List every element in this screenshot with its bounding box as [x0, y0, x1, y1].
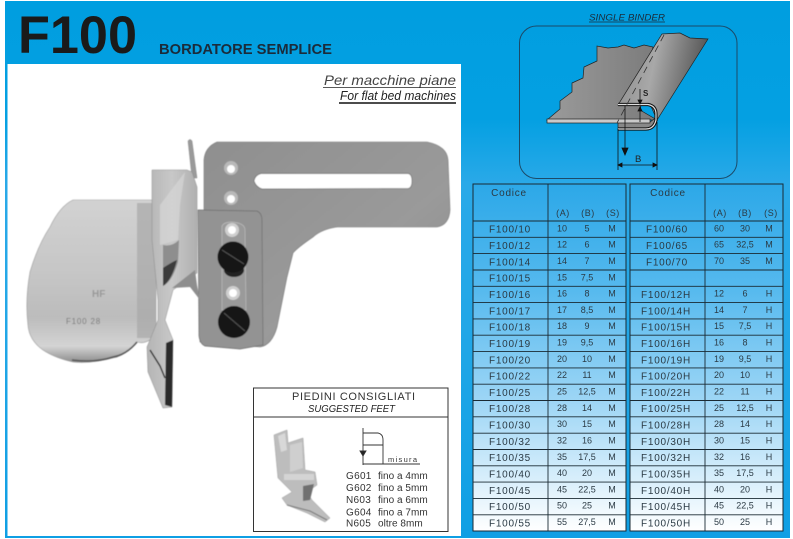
row F100/28H: 28 [714, 419, 724, 429]
row F100/40H: F100/40H [641, 486, 691, 497]
header row: (A) [556, 208, 570, 218]
row F100/15 [489, 272, 616, 285]
row F100/50H: 50 [714, 517, 724, 527]
row F100/70 [646, 256, 773, 268]
row F100/17: M [608, 305, 616, 315]
row F100/35H: H [766, 468, 772, 478]
row F100/25 [489, 386, 616, 399]
header row [491, 188, 620, 218]
row F100/19: 19 [557, 338, 567, 348]
header row: (B) [738, 208, 752, 218]
table: right codes [630, 184, 783, 531]
header row: (A) [713, 208, 727, 218]
row F100/15: 15 [557, 272, 567, 282]
row F100/50H: F100/50H [641, 518, 691, 530]
foot size list: G601 [346, 471, 372, 482]
row F100/22H: 22 [714, 386, 724, 396]
row F100/15: 7,5 [581, 272, 593, 282]
row F100/40: 20 [582, 468, 592, 478]
row F100/17: F100/17 [489, 306, 531, 317]
subtitle: Bordatore semplice: BORDATORE SEMPLICE [159, 41, 332, 58]
row F100/40H: 40 [714, 484, 724, 494]
row F100/19H: F100/19H [641, 355, 691, 366]
row F100/28H: H [766, 419, 772, 429]
row F100/35H [641, 468, 772, 480]
row F100/15H: 15 [714, 321, 724, 331]
row F100/10: M [608, 223, 616, 233]
row F100/30: M [608, 419, 616, 429]
row F100/70: M [765, 256, 773, 266]
row F100/20H: H [766, 370, 772, 380]
folding bowl [27, 200, 156, 362]
row F100/14H: 14 [714, 305, 724, 315]
row F100/16H: H [766, 338, 772, 348]
row F100/14H: 7 [742, 305, 748, 315]
diagram: measure: misura [388, 455, 418, 464]
photo: binder attachment [27, 140, 450, 408]
row F100/32: F100/32 [489, 437, 531, 448]
row F100/50: 50 [557, 501, 567, 511]
row F100/30H: F100/30H [641, 437, 691, 448]
row F100/45: 45 [557, 484, 567, 494]
row F100/45: 22,5 [578, 484, 596, 494]
row F100/22: F100/22 [489, 372, 531, 383]
row F100/12: F100/12 [489, 241, 531, 252]
row F100/14 [489, 256, 616, 268]
row F100/14: 7 [584, 256, 590, 266]
foot size list [346, 471, 428, 530]
row F100/14: 14 [557, 256, 567, 266]
row F100/28H: 14 [740, 419, 750, 429]
row F100/28: F100/28 [489, 404, 531, 415]
machine type note [323, 72, 456, 103]
row F100/40 [489, 468, 616, 480]
row F100/20: M [608, 354, 616, 364]
row F100/40H [641, 484, 772, 497]
foot size list: oltre 8mm [378, 518, 423, 530]
row F100/65: 32,5 [736, 240, 754, 250]
row F100/32: M [608, 436, 616, 446]
row F100/25: F100/25 [489, 388, 531, 399]
row F100/45 [489, 484, 616, 497]
row F100/30H: 30 [714, 436, 724, 446]
foot size list: fino a 7mm [378, 508, 428, 518]
row F100/20: F100/20 [489, 355, 531, 366]
row F100/45H: 22,5 [736, 501, 754, 511]
row F100/22H [641, 386, 772, 399]
row F100/60 [646, 223, 773, 236]
row F100/65 [646, 240, 773, 252]
diagram: single binder [520, 26, 737, 178]
row F100/60: 30 [740, 223, 750, 233]
row F100/50H: H [766, 517, 772, 527]
row F100/30H: H [766, 436, 772, 446]
heading: Single binder: SINGLE BINDER [589, 12, 665, 24]
row F100/70: 35 [740, 256, 750, 266]
row F100/35: 17,5 [578, 452, 596, 462]
row F100/45H: F100/45H [641, 502, 691, 513]
row F100/60: M [765, 223, 773, 233]
row F100/15H: F100/15H [641, 323, 691, 334]
row F100/15H [641, 321, 772, 334]
fabric edge [547, 119, 650, 123]
lower adjustment plate [198, 210, 263, 349]
row F100/45: M [608, 484, 616, 494]
row F100/12: M [608, 240, 616, 250]
row F100/16H: 16 [714, 338, 724, 348]
table: left codes [473, 184, 626, 531]
row F100/12H: H [766, 289, 772, 299]
row F100/60: F100/60 [646, 225, 688, 236]
row F100/30: F100/30 [489, 420, 531, 432]
row F100/15: M [608, 272, 616, 282]
row F100/65: M [765, 240, 773, 250]
row F100/14H: H [766, 305, 772, 315]
row F100/25H: F100/25H [641, 404, 691, 415]
folding bowl: F100 28 [66, 317, 101, 326]
row F100/10: 5 [584, 223, 590, 233]
lower binding tail [618, 117, 657, 130]
row F100/30: 15 [582, 419, 592, 429]
header row: (S) [606, 208, 620, 218]
guide pin [188, 140, 197, 178]
row F100/12H [641, 289, 772, 301]
row F100/10 [489, 223, 616, 236]
row F100/15H: H [766, 321, 772, 331]
header row: Codice [491, 188, 527, 199]
row F100/32: 32 [557, 436, 567, 446]
machine type note: For flat bed machines [340, 89, 456, 103]
row F100/40: M [608, 468, 616, 478]
row F100/55: 55 [557, 517, 567, 527]
row F100/16: M [608, 289, 616, 299]
row F100/35H: 35 [714, 468, 724, 478]
row F100/25: M [608, 386, 616, 396]
row F100/55: M [608, 517, 616, 527]
binding flap [618, 33, 708, 120]
row F100/16: 8 [584, 289, 590, 299]
row F100/18 [489, 321, 616, 334]
row F100/22H: H [766, 386, 772, 396]
dimension S: S [643, 89, 649, 98]
row F100/32H: 32 [714, 452, 724, 462]
heading: Piedini consigliati: PIEDINI CONSIGLIATI [292, 391, 415, 403]
panel: suggested feet [253, 388, 448, 532]
row F100/32 [489, 436, 616, 448]
row F100/16H: 8 [742, 338, 748, 348]
header row: (S) [764, 208, 778, 218]
row F100/25H: 12,5 [736, 403, 754, 413]
row F100/45H: H [766, 501, 772, 511]
row F100/20: 10 [582, 354, 592, 364]
row F100/35: F100/35 [489, 453, 531, 464]
row F100/19: 9,5 [581, 338, 593, 348]
row F100/50H [641, 517, 772, 530]
diagram: measure [360, 428, 420, 465]
folded edge [618, 104, 656, 129]
foot size list: fino a 6mm [378, 495, 428, 506]
row F100/40: F100/40 [489, 470, 531, 480]
foot size list: G602 [346, 483, 372, 494]
icon: presser foot [274, 430, 330, 522]
row F100/17: 8,5 [581, 305, 593, 315]
panel: product photo [8, 64, 461, 536]
row F100/32H: H [766, 452, 772, 462]
row F100/16 [489, 289, 616, 301]
row F100/40H: H [766, 484, 772, 494]
foot size list: G604 [346, 508, 372, 518]
row F100/25: 12,5 [578, 386, 596, 396]
row F100/25H: H [766, 403, 772, 413]
row F100/15H: 7,5 [739, 321, 751, 331]
row F100/40: 40 [557, 468, 567, 478]
row F100/14: F100/14 [489, 257, 531, 268]
row F100/19: M [608, 338, 616, 348]
row F100/20H [641, 370, 772, 383]
row F100/19H: 19 [714, 354, 724, 364]
header row: (B) [581, 208, 595, 218]
row F100/12: 6 [584, 240, 590, 250]
row F100/50: F100/50 [489, 502, 531, 513]
row F100/20 [489, 354, 616, 366]
row F100/28: 14 [582, 403, 592, 413]
row F100/28: M [608, 403, 616, 413]
row F100/16: F100/16 [489, 290, 531, 301]
dimension B: B [635, 154, 641, 165]
row F100/22: M [608, 370, 616, 380]
adjustment screws [218, 242, 250, 338]
row F100/28 [489, 403, 616, 415]
row F100/65: F100/65 [646, 241, 688, 252]
row F100/50 [489, 501, 616, 513]
row F100/35: 35 [557, 452, 567, 462]
row F100/19 [489, 338, 616, 350]
heading: Suggested feet: SUGGESTED FEET [308, 404, 396, 415]
row F100/40H: 20 [740, 484, 750, 494]
row F100/15: F100/15 [489, 274, 531, 285]
row F100/18: 9 [584, 321, 590, 331]
row F100/32H: F100/32H [641, 453, 691, 464]
row F100/19H [641, 354, 772, 366]
row F100/17 [489, 305, 616, 317]
row F100/20H: F100/20H [641, 372, 691, 383]
row F100/25: 25 [557, 386, 567, 396]
row F100/19H: 9,5 [739, 354, 751, 364]
row F100/16: 16 [557, 289, 567, 299]
row F100/50: M [608, 501, 616, 511]
header row: Codice [650, 188, 686, 199]
row F100/35: M [608, 452, 616, 462]
row F100/22: 22 [557, 370, 567, 380]
row F100/30H: 15 [740, 436, 750, 446]
row F100/14H: F100/14H [641, 306, 691, 317]
row F100/20: 20 [557, 354, 567, 364]
stitching [617, 35, 664, 123]
row F100/22H: 11 [740, 386, 750, 396]
row F100/12H: 12 [714, 289, 724, 299]
row F100/22 [489, 370, 616, 383]
foot size list: fino a 5mm [378, 483, 428, 494]
row F100/12H: 6 [742, 289, 748, 299]
row F100/45H [641, 501, 772, 513]
row F100/12 [489, 240, 616, 252]
header row [650, 188, 778, 218]
row F100/28: 28 [557, 403, 567, 413]
row F100/35 [489, 452, 616, 464]
row F100/32H: 16 [740, 452, 750, 462]
row F100/70: 70 [714, 256, 724, 266]
row F100/60: 60 [714, 223, 724, 233]
row F100/12H: F100/12H [641, 290, 691, 301]
folding bowl: HF [92, 289, 105, 300]
row F100/45H: 45 [714, 501, 724, 511]
fabric [547, 45, 657, 120]
row F100/10: 10 [557, 223, 567, 233]
foot size list: fino a 4mm [378, 471, 428, 482]
row F100/10: F100/10 [489, 225, 531, 236]
row F100/16H: F100/16H [641, 339, 691, 350]
row F100/65: 65 [714, 240, 724, 250]
row F100/35H: F100/35H [641, 470, 691, 480]
row F100/35H: 17,5 [736, 468, 754, 478]
row F100/25H [641, 403, 772, 415]
row F100/14H [641, 305, 772, 317]
row F100/32: 16 [582, 436, 592, 446]
row F100/22H: F100/22H [641, 388, 691, 399]
row F100/19: F100/19 [489, 339, 531, 350]
upper mounting plate [200, 142, 450, 347]
row F100/14: M [608, 256, 616, 266]
row F100/28H [641, 419, 772, 432]
row F100/50H: 25 [740, 517, 750, 527]
foot size list: N603 [346, 495, 371, 506]
title: F100: F100 [18, 6, 137, 65]
row F100/30 [489, 419, 616, 432]
row F100/20H: 20 [714, 370, 724, 380]
row F100/55: F100/55 [489, 518, 531, 530]
row F100/45: F100/45 [489, 486, 531, 497]
row F100/22: 11 [582, 370, 592, 380]
row F100/55 [489, 517, 616, 530]
row F100/28H: F100/28H [641, 420, 691, 432]
dimension S [638, 89, 649, 122]
machine type note: Per macchine piane [324, 72, 456, 88]
dimension B [618, 106, 657, 170]
row F100/18: F100/18 [489, 323, 531, 334]
row F100/20H: 10 [740, 370, 750, 380]
foot size list: N605 [346, 518, 371, 530]
row F100/25H: 25 [714, 403, 724, 413]
row F100/70: F100/70 [646, 257, 688, 268]
row F100/18: 18 [557, 321, 567, 331]
row F100/55: 27,5 [578, 517, 596, 527]
row F100/16H [641, 338, 772, 350]
folder body [147, 170, 200, 408]
row F100/19H: H [766, 354, 772, 364]
row F100/18: M [608, 321, 616, 331]
row F100/30H [641, 436, 772, 448]
row F100/12: 12 [557, 240, 567, 250]
row F100/50: 25 [582, 501, 592, 511]
row F100/17: 17 [557, 305, 567, 315]
row F100/30: 30 [557, 419, 567, 429]
row F100/32H [641, 452, 772, 464]
